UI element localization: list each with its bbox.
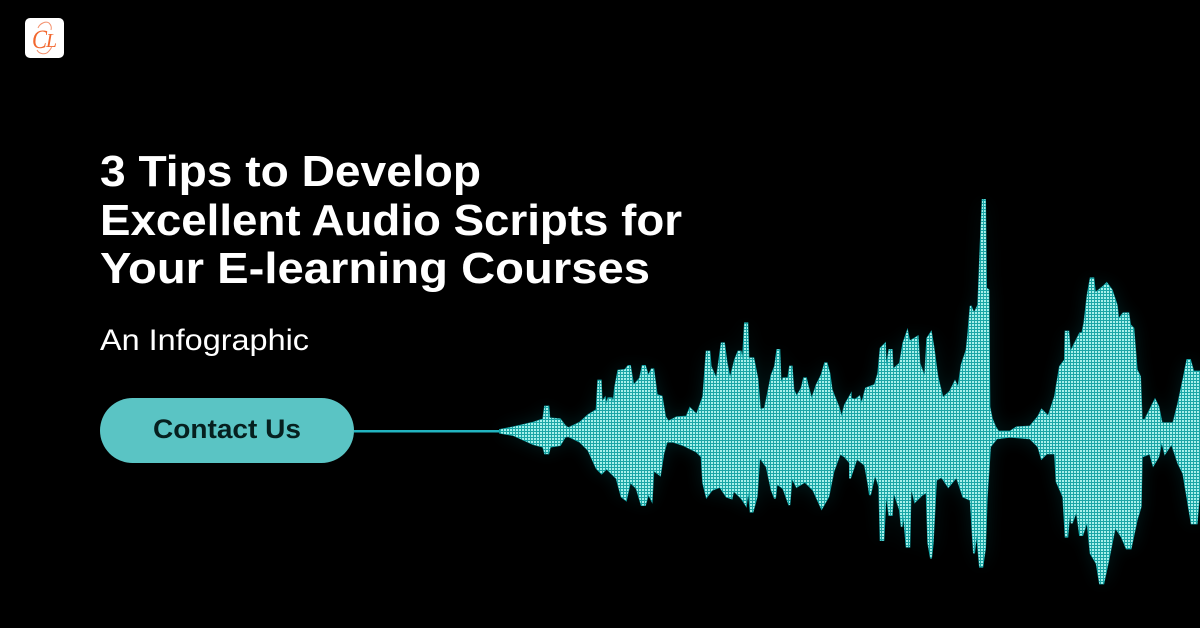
logo [25, 18, 64, 58]
button: contact us [100, 398, 354, 463]
button: contact us: Contact Us [153, 414, 301, 444]
title: Your E-learning Courses [100, 244, 650, 293]
title [100, 147, 682, 293]
title: Excellent Audio Scripts for [100, 196, 682, 245]
logo: C [32, 25, 48, 54]
title: 3 Tips to Develop [100, 147, 481, 196]
logo: L [45, 30, 57, 52]
subtitle: An Infographic [100, 324, 309, 357]
audio waveform [354, 190, 1200, 590]
